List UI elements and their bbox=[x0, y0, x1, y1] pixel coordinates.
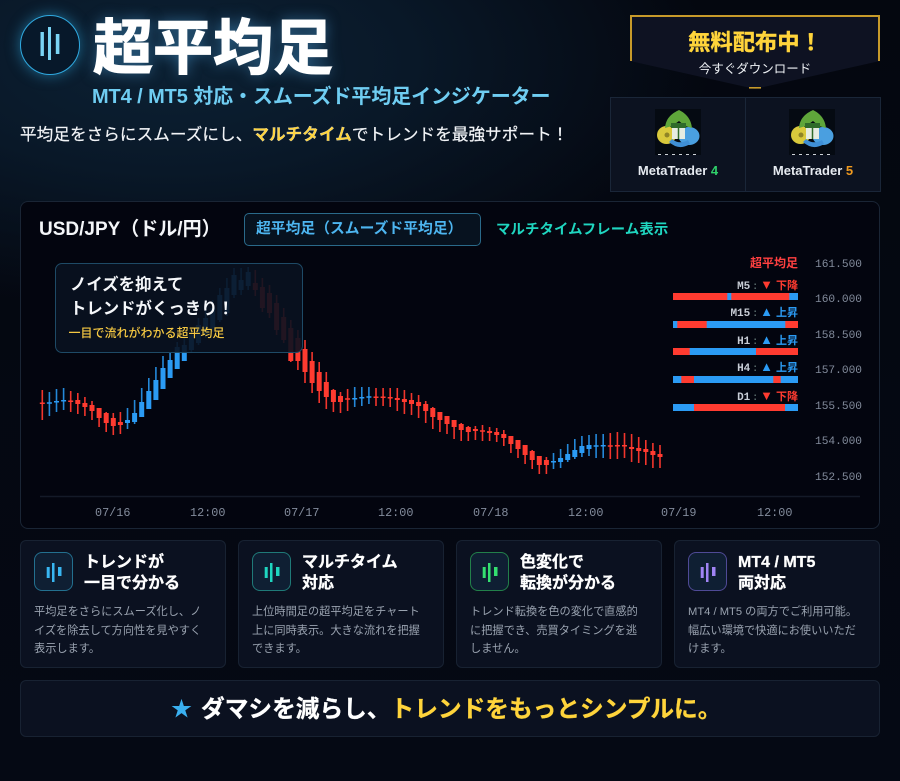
time axis: 07/16 bbox=[95, 506, 130, 520]
card title bbox=[738, 554, 816, 592]
card title bbox=[84, 552, 180, 592]
text: 154.000 bbox=[815, 436, 862, 448]
multi-timeframe panel bbox=[673, 256, 798, 411]
icon: blue bars bbox=[34, 552, 73, 591]
card title: MT4 / MT5 bbox=[738, 554, 815, 571]
row M5: M5 : ▼ 下降 bbox=[737, 277, 798, 293]
row H1: H1 : ▲ 上昇 bbox=[737, 332, 798, 348]
card text: トレンド転換を色の変化で直感的 bbox=[470, 606, 638, 618]
time axis: 07/19 bbox=[661, 506, 696, 520]
icon: teal bars bbox=[252, 552, 291, 591]
time axis: 07/17 bbox=[284, 506, 319, 520]
callout headline: ノイズを抑えて bbox=[70, 276, 183, 294]
tab: active: 超平均足（スムーズド平均足） bbox=[256, 221, 462, 237]
panel: MetaTrader 4 bbox=[610, 97, 746, 192]
icon: header logo bbox=[20, 15, 80, 75]
icon: MetaTrader 4 logo bbox=[655, 109, 701, 155]
card title: マルチタイム bbox=[302, 554, 398, 571]
text: 155.500 bbox=[815, 401, 862, 413]
row M15 bbox=[673, 304, 798, 328]
card: color change bbox=[456, 540, 662, 668]
panel: MetaTrader 5 bbox=[745, 97, 881, 192]
card title bbox=[302, 553, 398, 592]
card title: 対応 bbox=[302, 575, 334, 592]
ribbon: free download bbox=[630, 15, 880, 89]
row D1: D1 : ▼ 下降 bbox=[737, 388, 798, 404]
card text bbox=[252, 605, 420, 655]
icon: green bars bbox=[470, 552, 509, 591]
card text: できます。 bbox=[252, 643, 307, 655]
card text: イズを除去して方向性を見やすく bbox=[34, 625, 201, 637]
callout headline: トレンドがくっきり！ bbox=[70, 300, 234, 318]
card text bbox=[34, 605, 201, 655]
card text: に把握でき、売買タイミングを逃 bbox=[470, 625, 637, 637]
card title: 両対応 bbox=[738, 575, 786, 592]
title: 超平均足 bbox=[93, 15, 333, 82]
time axis: 07/18 bbox=[473, 506, 508, 520]
card text: 上位時間足の超平均足をチャート bbox=[252, 606, 420, 618]
banner bbox=[20, 680, 880, 737]
row H4 bbox=[673, 359, 798, 383]
banner text: ダマシを減らし、トレンドをもっとシンプルに。 bbox=[201, 697, 721, 723]
card title: 転換が分かる bbox=[520, 575, 616, 592]
label: MetaTrader 5 bbox=[773, 163, 853, 178]
row H1 bbox=[673, 332, 798, 355]
tab: active bbox=[244, 213, 481, 246]
panel: chart bbox=[20, 201, 880, 529]
callout bbox=[55, 263, 303, 353]
text: 161.500 bbox=[815, 259, 862, 271]
icon: MetaTrader 5 logo bbox=[789, 109, 835, 155]
price axis bbox=[815, 259, 862, 484]
card text: 上に同時表示。大きな流れを把握 bbox=[252, 625, 420, 637]
icon: purple bars bbox=[688, 552, 727, 591]
time axis bbox=[95, 506, 792, 520]
card title: 一目で分かる bbox=[84, 575, 180, 592]
card text: 幅広い環境で快適にお使いいただ bbox=[688, 625, 856, 637]
callout headline bbox=[70, 276, 234, 318]
card title: トレンドが bbox=[84, 554, 164, 571]
card: multi time bbox=[238, 540, 444, 668]
time axis: 12:00 bbox=[378, 506, 413, 520]
tab: multi timeframe: マルチタイムフレーム表示 bbox=[496, 222, 668, 238]
card text: 表示します。 bbox=[34, 643, 100, 655]
card title bbox=[520, 553, 616, 592]
card: trend at a glance bbox=[20, 540, 226, 668]
card text: けます。 bbox=[688, 643, 732, 655]
text: 160.000 bbox=[815, 294, 862, 306]
card text: 平均足をさらにスムーズ化し、ノ bbox=[34, 606, 201, 618]
text: 152.500 bbox=[815, 472, 862, 484]
card title: 色変化で bbox=[520, 554, 584, 571]
label: MetaTrader 4 bbox=[638, 163, 718, 178]
time axis: 12:00 bbox=[190, 506, 225, 520]
row D1 bbox=[673, 388, 798, 411]
card: MT4 / MT5 bbox=[674, 540, 880, 668]
banner star: ★ bbox=[171, 698, 192, 721]
card text: しません。 bbox=[470, 643, 526, 655]
text: 157.000 bbox=[815, 365, 862, 377]
subtitle: MT4 / MT5 対応・スムーズド平均足インジケーター bbox=[92, 86, 550, 108]
text: 158.500 bbox=[815, 330, 862, 342]
time axis: 12:00 bbox=[757, 506, 792, 520]
callout subtext: 一目で流れがわかる超平均足 bbox=[68, 326, 225, 340]
ribbon subtext: 今すぐダウンロード bbox=[699, 62, 811, 76]
card text bbox=[470, 605, 638, 655]
row M15: M15 : ▲ 上昇 bbox=[730, 304, 798, 320]
time axis: 12:00 bbox=[568, 506, 603, 520]
row H4: H4 : ▲ 上昇 bbox=[737, 359, 798, 375]
tagline: 平均足をさらにスムーズにし、マルチタイムでトレンドを最強サポート！ bbox=[20, 125, 568, 144]
chart heading: USD/JPY（ドル/円） bbox=[39, 219, 221, 240]
card text bbox=[688, 605, 857, 655]
panel title: 超平均足 bbox=[750, 256, 798, 270]
ribbon heading: 無料配布中！ bbox=[688, 30, 822, 55]
card text: MT4 / MT5 の両方でご利用可能。 bbox=[688, 606, 857, 618]
row M5 bbox=[673, 277, 798, 300]
